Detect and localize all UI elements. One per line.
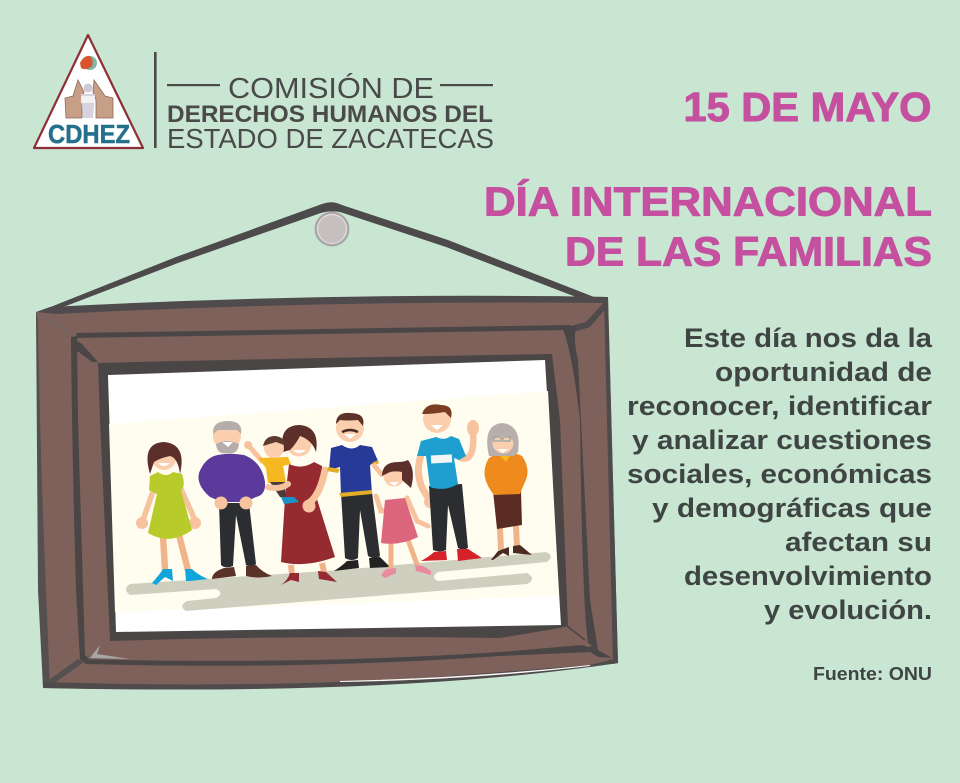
hanging cord and pin	[43, 202, 594, 310]
title: DE LAS FAMILIAS	[565, 228, 932, 274]
description text: reconocer, identificar	[627, 391, 933, 421]
figure: grandmother in orange sweater	[485, 423, 532, 560]
outer left edge	[36, 312, 50, 688]
figure: man in blue shirt waving	[417, 404, 482, 561]
date heading: 15 DE MAYO	[684, 84, 932, 130]
description text: y demográficas que	[652, 493, 932, 523]
outer top edge	[36, 296, 608, 314]
photo mat dark border	[98, 354, 568, 641]
inner rail right line	[562, 326, 598, 650]
logo: institution name: COMISIÓN DE	[228, 72, 434, 105]
ground shadow	[126, 552, 551, 611]
figure: father in navy shirt	[327, 413, 390, 571]
inner rail top line	[76, 325, 572, 338]
logo: institution name: ESTADO DE ZACATECAS	[167, 123, 494, 154]
figure: grandfather in purple sweater	[198, 421, 272, 579]
inner rail bottom line	[80, 645, 597, 666]
logo: CDHEZ triangle	[34, 35, 143, 149]
description text: y evolución.	[764, 595, 932, 625]
description text: y analizar cuestiones	[632, 425, 932, 455]
photo in frame	[108, 360, 561, 632]
title: DÍA INTERNACIONAL	[484, 178, 932, 224]
figure: girl in pink dress	[376, 460, 431, 578]
description text: oportunidad de	[715, 357, 932, 387]
outer right edge	[604, 297, 618, 664]
logo: CDHEZ triangle: CDHEZ	[48, 119, 130, 149]
bottom-right miter	[584, 646, 612, 658]
picture frame	[36, 296, 618, 690]
top-right miter	[570, 300, 608, 332]
description text: desenvolvimiento	[684, 561, 932, 591]
inner rail left line	[71, 336, 89, 660]
bottom-left miter	[46, 659, 84, 682]
title	[484, 178, 932, 274]
source note: Fuente: ONU	[813, 664, 932, 684]
top-left miter	[37, 312, 71, 337]
logo: institution name: DERECHOS HUMANOS DEL	[167, 101, 493, 128]
description text: sociales, económicas	[627, 459, 932, 489]
figure: girl in green dress	[136, 442, 208, 585]
description text	[627, 323, 933, 625]
logo: institution name	[154, 52, 494, 154]
description text: afectan su	[785, 527, 932, 557]
figure: mother in red dress holding child	[244, 425, 337, 585]
outer bottom edge	[43, 658, 618, 690]
description text: Este día nos da la	[684, 323, 933, 353]
child	[244, 436, 299, 504]
